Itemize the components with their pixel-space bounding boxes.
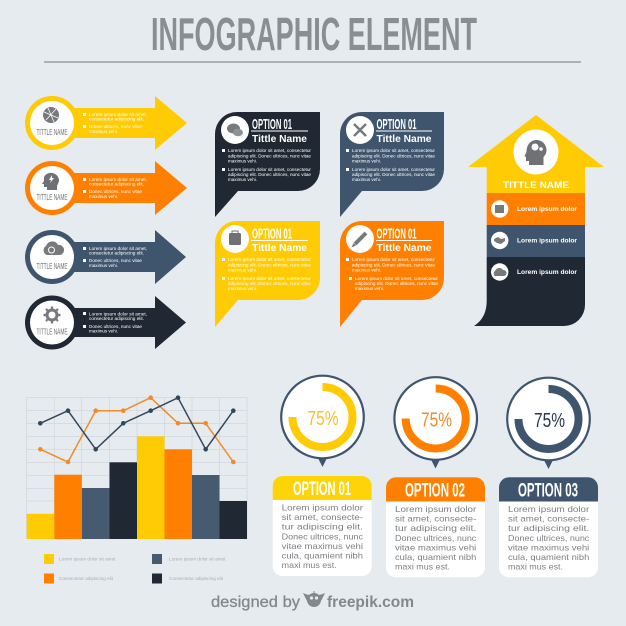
orange line <box>38 395 236 464</box>
panel: slate arrow <box>25 230 186 284</box>
panel: yellow arrow <box>25 96 187 150</box>
panel: dark speech bubble: Lorem ipsum dolor sit amet, consectetur <box>228 148 312 153</box>
slate line <box>38 395 236 452</box>
chart legend: Consectetur adipiscing elit <box>59 576 114 581</box>
bars <box>27 436 247 539</box>
gauge: option 01: 75% <box>308 408 339 430</box>
panel: orange arrow: Lorem ipsum dolor sit amet, <box>89 177 147 182</box>
icon: globe <box>43 107 59 123</box>
panel: yellow speech bubble: Tittle Name <box>252 243 307 254</box>
panel: orange speech bubble: adipiscing elit. Donec ultrices, nunc vitae <box>355 281 439 286</box>
panel: orange speech bubble: Tittle Name <box>376 243 432 254</box>
panel: dark arrow: TITTLE NAME <box>36 328 68 336</box>
panel: dark arrow: Donec ultrices, nunc vitae <box>89 324 143 329</box>
panel: dark speech bubble <box>215 112 320 217</box>
card: option 01: maxi mus est. <box>282 561 337 570</box>
panel: yellow speech bubble: maximus vehi. <box>228 268 257 272</box>
icon: chat <box>227 124 243 136</box>
gauge: option 03 <box>507 378 590 469</box>
panel: yellow speech bubble: adipiscing elit. Donec ultrices, nunc vitae <box>228 281 312 286</box>
card: option 02: cula, quamient nibh <box>395 553 477 562</box>
card: option 03: OPTION 03 <box>518 480 578 502</box>
footer credit: designed by <box>211 594 300 611</box>
panel: orange arrow: maximus vehi. <box>89 194 118 199</box>
card: option 03 <box>499 477 598 577</box>
footer credit <box>211 591 414 611</box>
panel: orange speech bubble: OPTION 01 <box>376 226 416 242</box>
icon: briefcase row <box>491 200 508 218</box>
panel: dark speech bubble: maximus vehi. <box>228 158 257 164</box>
card: option 03: cula, quamient nibh <box>508 553 590 562</box>
card: option 02: Lorem ipsum dolor <box>395 505 477 514</box>
panel: slate speech bubble: maximus vehi. <box>352 158 381 164</box>
icon: handshake row <box>491 232 508 249</box>
panel: slate speech bubble: OPTION 01 <box>376 116 416 133</box>
panel: slate speech bubble: adipiscing elit. Donec ultrices, nunc vitae <box>352 172 436 177</box>
panel: slate arrow: Lorem ipsum dolor sit amet, <box>89 246 147 251</box>
icon: freepik logo <box>304 591 324 607</box>
icon: briefcase <box>229 231 241 245</box>
panel: dark arrow: maximus vehi. <box>89 328 118 334</box>
card: option 02 <box>386 477 485 577</box>
panel: slate speech bubble <box>340 112 444 217</box>
card: option 02: Donec ultrices, nunc <box>395 534 476 543</box>
icon: pencil <box>352 233 366 248</box>
chart legend: Lorem ipsum dolor sit amet <box>169 556 226 562</box>
card: option 02: maxi mus est. <box>395 562 450 572</box>
panel: slate speech bubble: Tittle Name <box>376 134 432 145</box>
panel: yellow speech bubble <box>215 221 320 327</box>
panel: slate speech bubble: adipiscing elit. Donec ultrices, nunc vitae <box>352 154 436 158</box>
panel: dark speech bubble: OPTION 01 <box>252 116 292 133</box>
card: option 02: sit amet, consecte- <box>395 514 477 524</box>
card: option 03: sit amet, consecte- <box>508 514 590 524</box>
panel: yellow speech bubble: adipiscing elit. Donec ultrices, nunc vitae <box>228 262 312 268</box>
icon: tools <box>354 124 366 136</box>
panel: orange speech bubble: maximus vehi. <box>352 268 381 272</box>
icon: cloud sync <box>44 241 64 255</box>
card: option 03: vitae maximus vehi <box>508 544 590 552</box>
chart legend <box>44 554 226 584</box>
panel: dark speech bubble: Tittle Name <box>252 134 307 145</box>
gauge: option 03: 75% <box>534 410 565 432</box>
card: option 02: tur adipiscing elit. <box>395 524 476 533</box>
panel: dark arrow: Lorem ipsum dolor sit amet, <box>89 312 147 316</box>
panel: up arrow: Lorem ipsum dolor <box>517 206 578 213</box>
card: option 03: maxi mus est. <box>508 562 563 572</box>
panel: yellow arrow: Donec ultrices, nunc vitae <box>89 124 143 129</box>
panel: yellow speech bubble: OPTION 01 <box>252 226 292 242</box>
card: option 01: OPTION 01 <box>293 479 351 500</box>
icon: head with bolt <box>42 173 59 190</box>
panel: slate speech bubble: Lorem ipsum dolor sit amet, consectetur <box>352 148 436 153</box>
panel: up arrow: TITTLE NAME <box>503 180 569 191</box>
panel: orange arrow <box>25 161 187 215</box>
panel: up arrow <box>468 115 604 326</box>
panel: orange arrow: Donec ultrices, nunc vitae <box>89 189 143 194</box>
card: option 01 <box>273 476 372 576</box>
card: option 02: vitae maximus vehi <box>395 544 477 552</box>
panel: orange arrow: consectetur adipiscing elit. <box>89 182 144 186</box>
card: option 01: cula, quamient nibh <box>282 552 363 560</box>
panel: orange arrow: TITTLE NAME <box>36 193 68 202</box>
panel: dark arrow <box>25 296 186 350</box>
panel: orange speech bubble: adipiscing elit. Donec ultrices, nunc vitae <box>352 262 436 268</box>
card: option 01: vitae maximus vehi <box>282 542 363 551</box>
panel: yellow arrow: consectetur adipiscing elit. <box>89 116 144 122</box>
panel: orange speech bubble <box>340 221 444 327</box>
chart legend: Lorem ipsum dolor sit amet <box>59 556 116 562</box>
card: option 01: sit amet, consecte- <box>282 513 363 522</box>
icon: cloud row <box>491 263 508 281</box>
card: option 03: Donec ultrices, nunc <box>508 534 589 543</box>
card: option 02: OPTION 02 <box>405 480 465 502</box>
panel: yellow arrow: TITTLE NAME <box>36 128 68 137</box>
card: option 03: Lorem ipsum dolor <box>508 505 590 514</box>
card: option 01: tur adipiscing elit. <box>282 523 363 532</box>
panel: slate arrow: maximus vehi. <box>89 263 118 268</box>
panel: up arrow: Lorem ipsum dolor <box>517 269 578 276</box>
panel: dark speech bubble: adipiscing elit. Donec ultrices, nunc vitae <box>228 172 312 177</box>
panel: slate arrow: consectetur adipiscing elit. <box>89 250 144 256</box>
chart legend: Consectetur adipiscing elit <box>169 576 224 581</box>
panel: up arrow: Lorem ipsum dolor <box>517 238 578 244</box>
panel: dark speech bubble: maximus vehi. <box>228 177 257 182</box>
panel: yellow speech bubble: maximus vehi. <box>228 286 257 291</box>
panel: yellow speech bubble: Lorem ipsum dolor sit amet, consectetur <box>228 257 312 262</box>
panel: slate arrow: TITTLE NAME <box>36 262 68 271</box>
panel: dark speech bubble: adipiscing elit. Donec ultrices, nunc vitae <box>228 154 312 158</box>
gauge: option 01 <box>281 376 364 467</box>
card: option 03: tur adipiscing elit. <box>508 524 589 533</box>
card: option 01: Donec ultrices, nunc <box>282 532 363 541</box>
footer credit: freepik.com <box>327 594 414 611</box>
panel: orange speech bubble: maximus vehi. <box>355 286 384 291</box>
panel: orange speech bubble: Lorem ipsum dolor sit amet, consectetur <box>352 257 436 262</box>
panel: slate speech bubble: maximus vehi. <box>352 177 381 182</box>
panel: yellow arrow: Lorem ipsum dolor sit amet, <box>89 112 147 117</box>
panel: orange speech bubble: Lorem ipsum dolor sit amet, consectetur <box>355 276 439 281</box>
panel: slate speech bubble: Lorem ipsum dolor sit amet, consectetur <box>352 167 436 172</box>
gauge: option 02 <box>394 377 477 468</box>
card: option 01: Lorem ipsum dolor <box>282 504 363 512</box>
panel: yellow arrow: maximus vehi. <box>89 129 118 134</box>
icon: gear <box>44 306 60 324</box>
gauge: option 02: 75% <box>421 410 452 432</box>
panel: yellow speech bubble: Lorem ipsum dolor sit amet, consectetur <box>228 276 312 281</box>
panel: dark speech bubble: Lorem ipsum dolor sit amet, consectetur <box>228 167 312 172</box>
icon: head with gears <box>524 140 546 165</box>
panel: slate arrow: Donec ultrices, nunc vitae <box>89 258 143 263</box>
chart: bars and lines <box>26 395 247 539</box>
panel: dark arrow: consectetur adipiscing elit. <box>89 316 144 321</box>
